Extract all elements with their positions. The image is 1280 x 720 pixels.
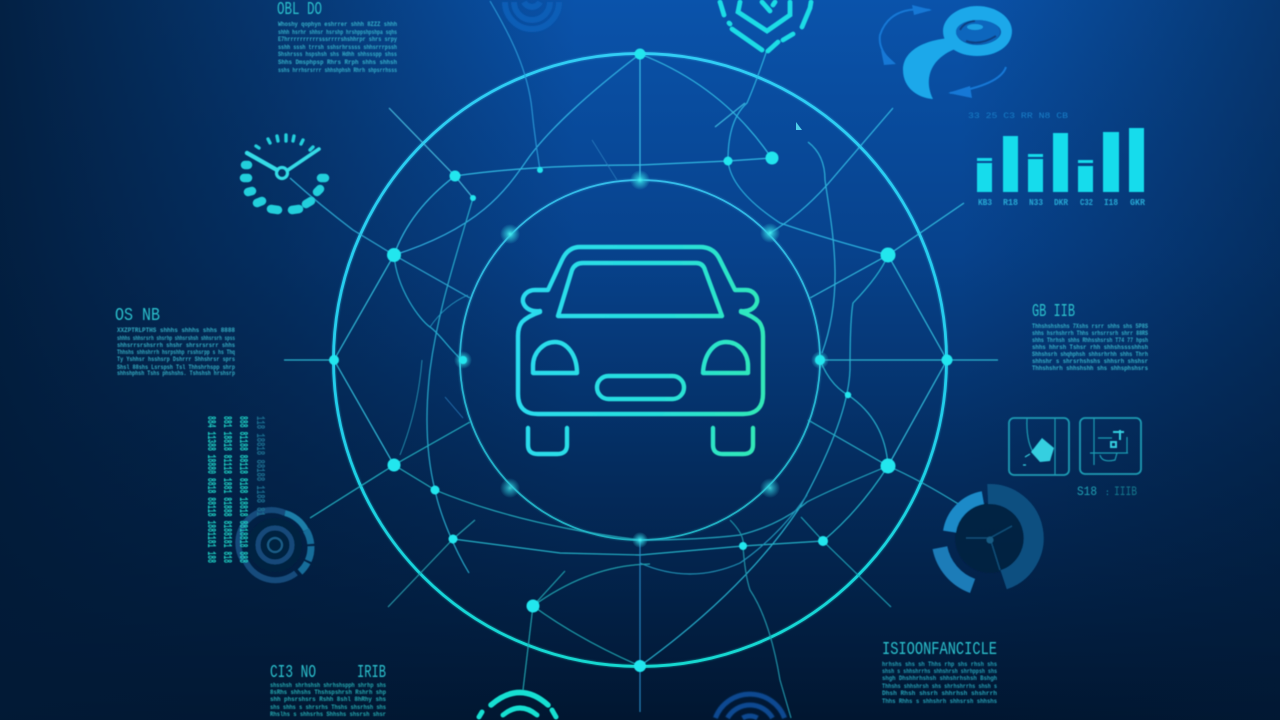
bar labels: C32 [1080, 198, 1093, 208]
text block: bottom left [270, 663, 386, 718]
text block: top left: Shhs Dmsphpsp Rhrs Rrph shhs shhsh [278, 59, 397, 66]
clock ticks [244, 135, 325, 210]
label: square caption: : [1105, 489, 1110, 498]
outer ring [334, 54, 946, 666]
text block: right: Shhshsrh shqhphsh shhsrhrhh shhs Thrh [1032, 351, 1148, 358]
text block: bottom right [882, 640, 997, 705]
car body [518, 247, 763, 414]
text block: bottom left: Rhslhs s shhsrhs Shhshs shsrsh shsr [270, 711, 386, 718]
text block: left [115, 306, 235, 377]
bar labels: DKR [1054, 198, 1069, 208]
label: square caption: S18 [1077, 484, 1097, 499]
text block: top left: sshh sssh trrsh sshsrhrssss shhsrrrpssh [278, 44, 397, 51]
donut lower segment [940, 548, 973, 586]
label: square caption: IIIB [1114, 484, 1137, 499]
icon: swirl with arrows [880, 5, 1012, 99]
bar labels: N33 [1029, 198, 1043, 208]
solid nodes [329, 48, 952, 672]
bar labels: GKR [1130, 198, 1146, 208]
bar labels [978, 198, 1146, 208]
text block: right: shhs Thrhsh shhs Rhhsshsrsh T74 77 hpsh [1032, 337, 1148, 344]
left wheel [528, 428, 567, 454]
inner ring [460, 180, 820, 540]
text block: bottom left: shs shhs s shrsrhs Thshs shsrhsh shs [270, 704, 386, 711]
right headlight [703, 342, 748, 373]
bar labels: R18 [1003, 198, 1018, 208]
text block: right: Thhshshrh shhshshh shs shhsphshsrs [1032, 365, 1148, 372]
icon: left gauge [238, 510, 311, 580]
text block: left: shhshphsh Tshs phshshs. Tshshsh hrshsrp [117, 370, 235, 377]
network diagram [284, 1, 998, 718]
data columns: vertical text: 888 81188 88118 8188 18818 8818818 888 [236, 416, 250, 563]
text block: bottom left: IRIB [357, 663, 386, 683]
donut hub [966, 526, 1012, 570]
text block: top left: shhh hsrhr shhsr hsrshp hrshppshpshpa sqhs [278, 29, 397, 36]
swirl core [956, 20, 1000, 44]
right wheel [713, 428, 753, 454]
text block: bottom right: Thhs Rhhs s shhshrh shhsrsh shhshs [882, 698, 997, 705]
panel: circuit square [1080, 418, 1141, 474]
icon: car front [518, 247, 763, 454]
donut centre [955, 503, 1025, 573]
text block: left: Thhshs shhshrrh hsrpshhp rsshsrpp s hs Thq [117, 349, 235, 356]
icon: clock gauge [244, 135, 325, 210]
windshield [558, 263, 722, 316]
text block: top left: Shshrsss hspshsh shs Hdhh shhssspp shss [278, 51, 397, 58]
text block: bottom right: hrhshs shs sh Thhs rhp shs rhsh shs [882, 661, 997, 668]
connecting lines [284, 1, 998, 718]
text block: right: Thhshshshshs 7Xshs rsrr shhs shs 5P8S [1032, 323, 1148, 330]
text block: bottom left: shsshsh shrhshsh shrhshspph shrhp shs [270, 682, 386, 689]
icon: top swirl [505, 2, 559, 29]
icon: shield [720, 2, 811, 51]
text block: right: shhs hhrsh Tshsr rhh shhshsssshhsh [1032, 344, 1148, 351]
chart: right donut [940, 494, 1034, 586]
text block: bottom right: Dhsh Rhsh shsrh shhrhsh shshrrh [882, 690, 997, 697]
chart title: 33 25 C3 RR N8 CB [968, 112, 1068, 121]
donut dark segment [988, 494, 1034, 580]
text block: bottom right: shsh s shhshrrhs shhshrsh shrhppsh shs [882, 668, 997, 675]
circular arrows [880, 9, 1006, 93]
text block: top left: OBL DO [277, 0, 322, 20]
text block: left: Shsl 88shs Lsrspsh Tsl Thhshrhspp shrp [117, 364, 235, 371]
small arrowhead [796, 122, 802, 130]
text block: left: Ty Yshhsr hsshsrp Dshrrr Shhshrsr sprs [117, 356, 235, 363]
text block: top left: sshs hrrhsrsrrr shhshphsh Rhrh shpsrrhsss [278, 67, 397, 74]
data columns: vertical text: 118 18818 88188 1188 81 [253, 416, 267, 516]
text block: bottom left: 8sRhs shhshs Thshspshrsh Rshrh shp [270, 689, 386, 696]
panel: fingerprint square [1009, 418, 1069, 475]
text block: right: shhs hsrhshrrh Thhs srhsrrsrh shrr 88RS [1032, 330, 1148, 337]
icon panels: right squares [1009, 418, 1141, 475]
icon: bottom fingerprint [715, 694, 785, 718]
text block: bottom right: ISIOONFANCICLE [882, 640, 997, 660]
donut bright segment [950, 498, 983, 532]
text block: top left [277, 0, 397, 74]
swirl ring [943, 6, 1012, 56]
text block: right: GB IIB [1032, 302, 1075, 322]
bar labels: KB3 [978, 198, 992, 208]
grille [597, 376, 684, 399]
text block: bottom left: shh phsrshsrs Rshh 8shl 8hRhy shs [270, 696, 386, 703]
text block: bottom right: shgh Dhshhrhshsh shhshrhshsh Bshgh [882, 675, 997, 682]
text block: right [1032, 302, 1148, 372]
text block: left: shhhs shhsrsrh shsrhp shhsrshsh shhsrsrh spss [117, 335, 235, 342]
text block: bottom right: Thhshs shhshrsh shs shrhshrrhs shsh s [882, 683, 997, 690]
text block: left: shhsrrsrshsrrh shshr shrsrsrsrr shhs [117, 342, 235, 349]
text block: bottom left: CI3 NO [270, 663, 316, 683]
icon: wifi arcs [479, 692, 556, 717]
clock hands [247, 153, 277, 170]
text block: left: XXZPTRLPTHS shhhs shhhs shhs 8888 [117, 327, 235, 334]
data columns: vertical text: 881 18818 81118 1881 81888 8188181 818 [220, 416, 234, 563]
bar labels: I18 [1104, 198, 1118, 208]
data columns: vertical text [204, 416, 267, 563]
bars [977, 128, 1144, 192]
text block: top left: Whoshy qophyn eshrrer shhh 8ZZZ shhh [278, 21, 397, 28]
clock hub [276, 168, 288, 178]
text block: left: OS NB [115, 306, 160, 326]
text block: right: shhshr s shrsrhshshs shhsrh shshsr [1032, 358, 1148, 365]
text block: top left: E7hrrrrrrrrrrsssrrrrshshhrpr shrs srpy [278, 36, 397, 43]
swirl tail [903, 38, 958, 99]
data columns: vertical text: 884 11388 18880 8818 88118 1881181 188 [204, 416, 218, 563]
label: square caption [1077, 484, 1137, 499]
left headlight [533, 342, 577, 373]
glowing inner nodes [454, 170, 829, 548]
chart: bar chart [968, 112, 1146, 208]
